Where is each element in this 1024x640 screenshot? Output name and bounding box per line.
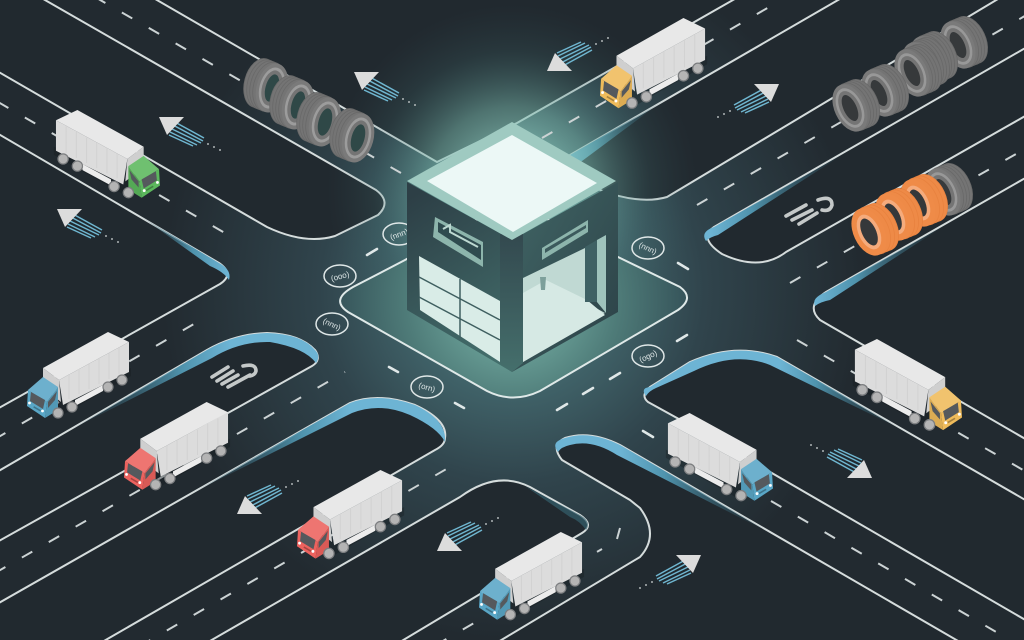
block: right lower (644, 351, 1024, 625)
arrow (57, 209, 119, 243)
direction arrows (57, 37, 872, 589)
dashes: upper right road (697, 13, 1024, 205)
left wall (407, 182, 512, 372)
right wall (512, 182, 618, 372)
dashes: bottom right road (771, 501, 1010, 640)
badge: (nnn) (637, 240, 658, 257)
roof rim (407, 122, 616, 240)
block: lower left one (0, 333, 318, 546)
magnet icon: right (786, 198, 832, 224)
block: upper right with orange tires (708, 43, 1024, 263)
sign: right (542, 220, 588, 260)
arrow (547, 37, 609, 71)
open bay (523, 235, 606, 362)
arrow (437, 517, 499, 551)
truck: blue right (666, 413, 773, 501)
badge (411, 376, 443, 398)
accent: right lower (644, 351, 905, 431)
arrow (810, 444, 872, 478)
block: lower left two (0, 398, 445, 640)
hub island (340, 200, 687, 398)
tire stack: top left (239, 55, 379, 166)
garage door (419, 256, 500, 362)
badge: (nnn) (389, 227, 410, 242)
truck: blue left (27, 332, 131, 418)
block: bottom (203, 480, 588, 640)
dashes: lower left road three (140, 460, 462, 640)
arrow (354, 72, 416, 106)
dashes: bottom road (436, 549, 602, 640)
steep dash on bottom curve (617, 528, 620, 539)
soft glow of the building (300, 0, 724, 400)
dashes: lower left road one (0, 317, 206, 439)
badge (632, 345, 664, 367)
truck: green (54, 110, 160, 198)
block: right (814, 173, 1024, 444)
accent: left block (140, 216, 230, 280)
accent: lower left one (70, 333, 318, 430)
badge: (nnn) (321, 316, 342, 333)
truck: yellow right (853, 339, 962, 430)
badge: (ooo) (330, 270, 351, 283)
badge: (orn) (418, 381, 437, 394)
dashes: top left road (95, 0, 420, 184)
accent: bottom block shadow (525, 486, 588, 530)
block: top centre (150, 0, 740, 162)
dashes: right lower road (797, 340, 1024, 474)
accent: lower left two (190, 398, 445, 494)
arrow (639, 555, 701, 589)
arrow (237, 480, 299, 514)
truck: yellow top (600, 18, 707, 108)
badge (316, 313, 348, 335)
accent: right (814, 222, 950, 306)
accent: building rear road (570, 103, 660, 164)
magnet icon: left (212, 365, 256, 387)
roof skylight (427, 135, 597, 232)
accent: bottom right (555, 435, 780, 538)
block: upper right (570, 0, 1003, 200)
corner pillar (500, 234, 523, 372)
truck: red two (297, 470, 404, 559)
badge (324, 265, 356, 287)
tire stack: orange (844, 158, 980, 261)
block: bottom right (493, 435, 965, 640)
truck: blue bottom (479, 532, 584, 620)
block: left (0, 129, 227, 413)
accent: upper right (704, 150, 850, 241)
building (407, 122, 618, 372)
tire stack: top right (825, 11, 995, 137)
block: top left (0, 0, 385, 239)
blue road edge accents (70, 103, 950, 538)
dashes: lower left road two (0, 372, 345, 573)
dashes: top road (542, 0, 790, 138)
dashes: left road (0, 102, 225, 233)
badge (383, 223, 415, 245)
badge: (ogo) (638, 348, 659, 364)
badge (632, 237, 664, 259)
arrow (159, 117, 221, 151)
dashes: right road (790, 146, 1024, 283)
person (540, 277, 546, 290)
round road badges (316, 223, 664, 398)
bright dashes near hub (367, 249, 688, 437)
arrow (717, 84, 779, 118)
truck: red one (124, 402, 230, 490)
sign: left (433, 217, 483, 267)
